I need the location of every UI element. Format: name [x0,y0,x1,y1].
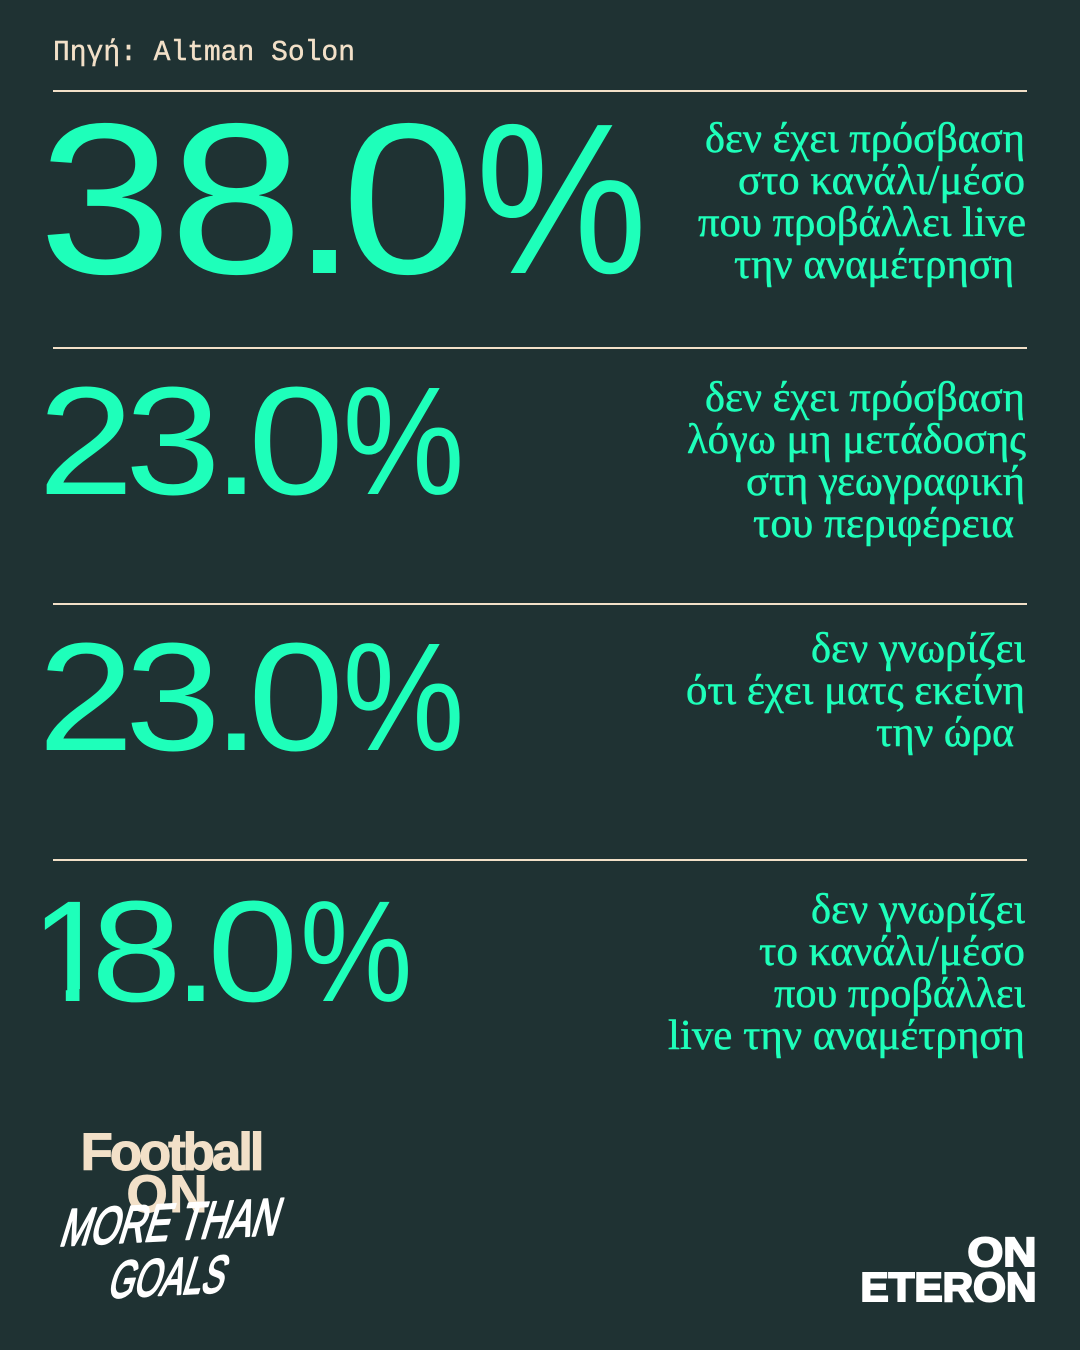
wordmark ON: ON [126,1165,208,1224]
description 1: την αναμέτρηση [734,242,1014,288]
description 2: του περιφέρεια [753,501,1014,547]
description 4 [668,887,1026,1059]
description 1: δεν έχει πρόσβαση [705,116,1025,162]
description 4: live την αναμέτρηση [668,1013,1025,1059]
row 3: 23.0% [38,611,1026,783]
big number 23.0%: 23.0 [38,611,344,783]
description 3: ότι έχει ματς εκείνη [686,668,1025,714]
description 2 [687,375,1026,547]
description 4: το κανάλι/μέσο [759,929,1025,975]
logo: ON ETERON [860,1229,1036,1310]
big number 18.0% [44,900,408,1002]
wordmark Football: Football [80,1123,264,1182]
description 3: την ώρα [876,710,1014,756]
big number 23.0%: 23.0 [38,355,344,527]
big number 18.0%: 1 [31,871,111,1032]
description 4: δεν γνωρίζει [811,887,1026,933]
big number 38.0%: 38.0 [38,80,475,319]
big number 18.0%: 8.0 [91,871,298,1032]
description 1 [698,116,1026,288]
description 3 [686,626,1026,756]
description 1: στο κανάλι/μέσο [738,158,1025,204]
row 4: 18.0% [44,892,1026,1058]
description 4: που προβάλλει [774,971,1026,1017]
wordmark ON: ON [968,1229,1036,1275]
big number 23.0%: % [343,355,464,527]
row 1: 38.0% [38,79,1026,319]
description 3: δεν γνωρίζει [811,626,1026,672]
wordmark ETERON: ETERON [860,1264,1036,1310]
row 2: 23.0% [38,355,1026,547]
script MORE THAN: MORE THAN [54,1187,290,1258]
description 2: στη γεωγραφική [746,459,1025,505]
big number 23.0%: % [343,611,464,783]
description 2: δεν έχει πρόσβαση [705,375,1025,421]
description 1: που προβάλλει live [698,200,1026,246]
description 2: λόγω μη μετάδοσης [687,417,1026,463]
logo: Football ON More Than Goals [54,1123,290,1310]
big number 38.0%: % [476,79,647,319]
big number 18.0%: % [300,870,412,1032]
source line: Πηγή: Altman Solon [53,36,355,69]
script GOALS: GOALS [102,1245,236,1310]
